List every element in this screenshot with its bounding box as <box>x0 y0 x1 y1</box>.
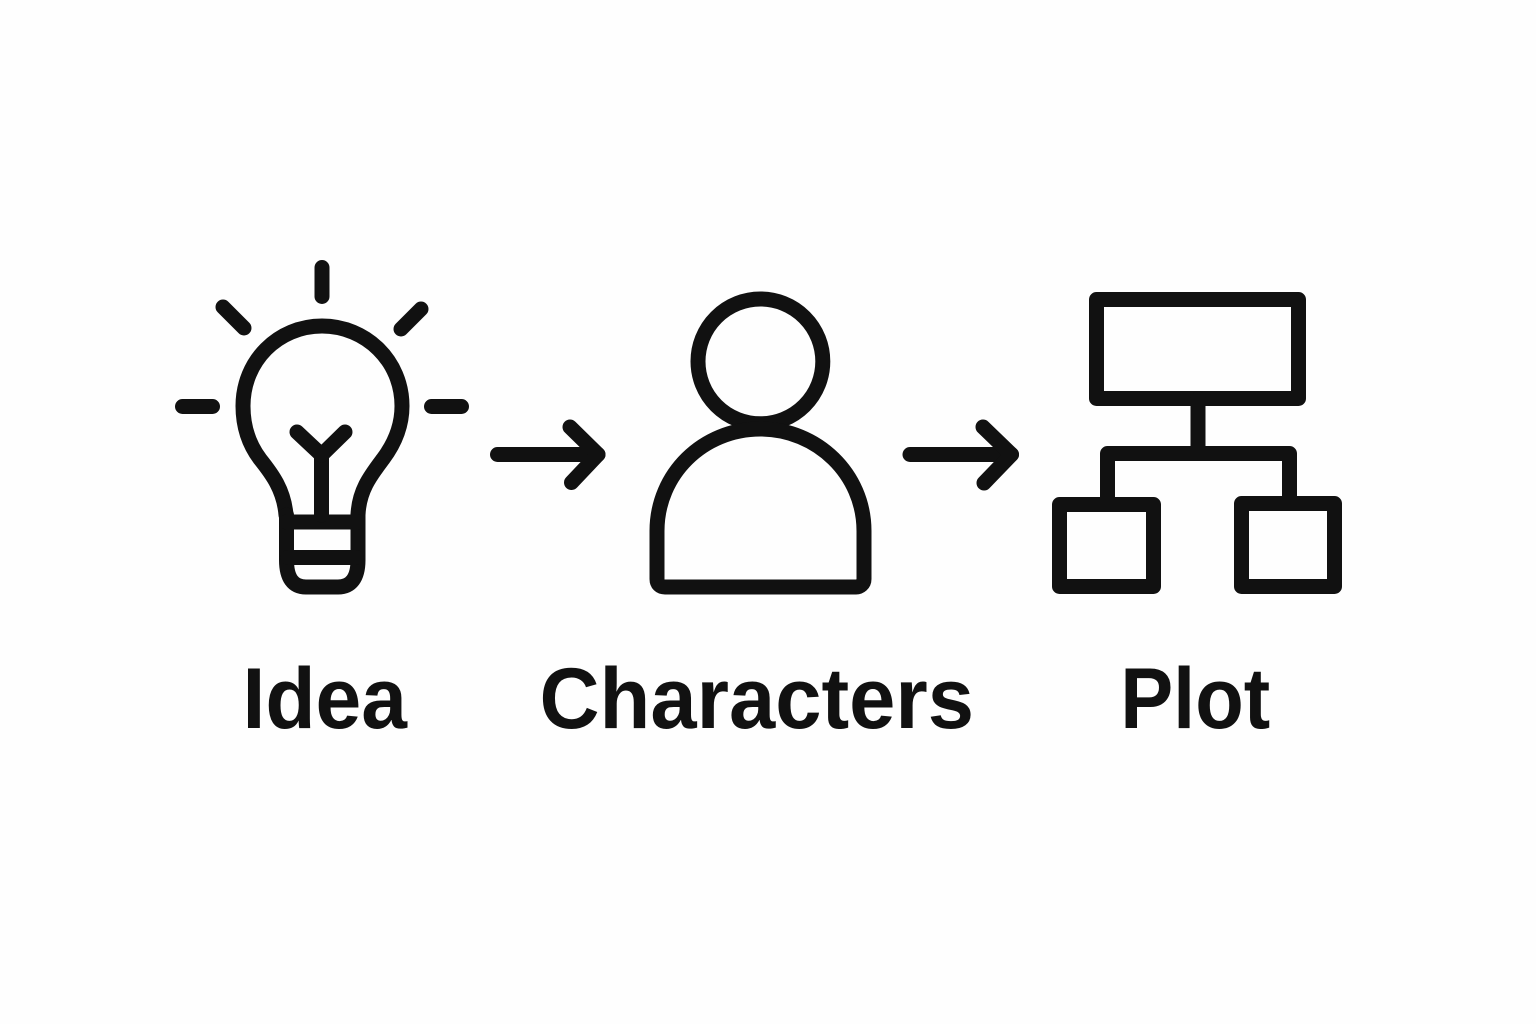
label: Plot: Plot <box>1120 651 1270 747</box>
icon: plot hierarchy diagram <box>1060 300 1334 586</box>
label: Characters: Characters <box>540 651 974 747</box>
label: Idea: Idea <box>242 651 408 747</box>
arrow: idea to characters <box>498 427 598 482</box>
icon: light bulb with rays <box>182 268 462 587</box>
arrow: characters to plot <box>910 427 1012 483</box>
icon: person <box>657 299 864 587</box>
